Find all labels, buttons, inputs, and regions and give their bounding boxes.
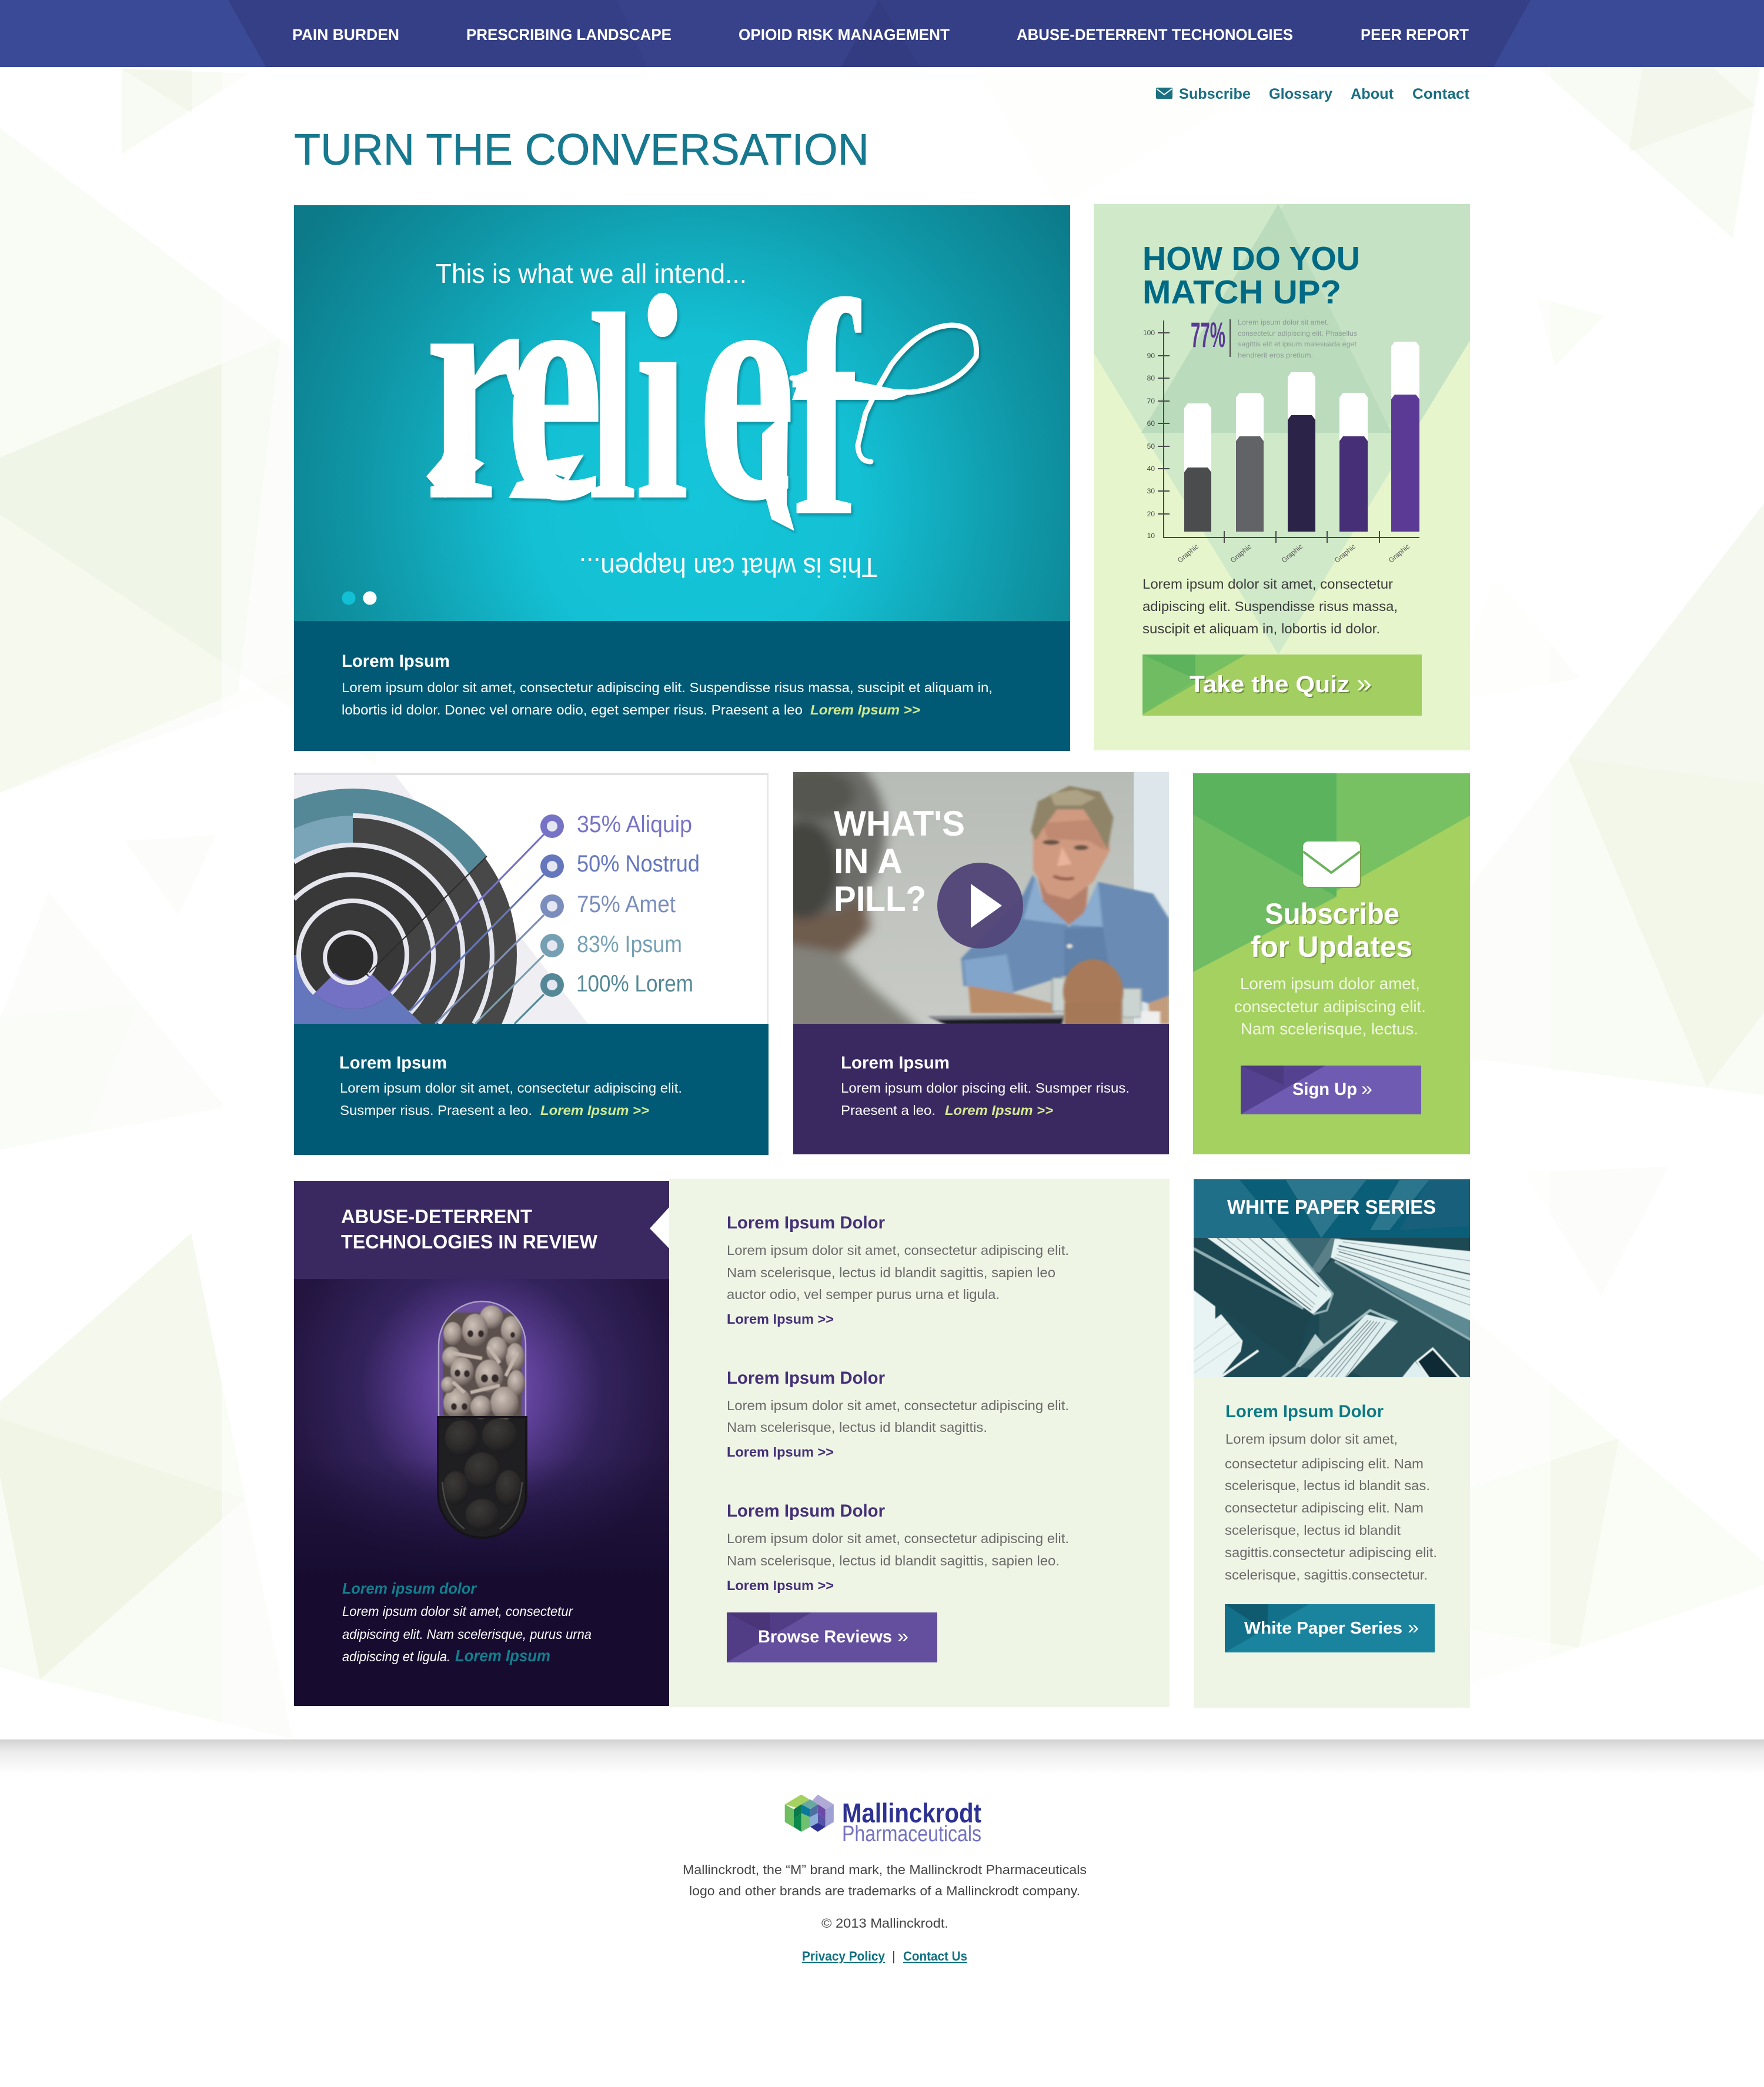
subscribe heading (1251, 897, 1412, 963)
y axis labels: 30 (1147, 487, 1155, 495)
white paper header band: WHITE PAPER SERIES (1227, 1196, 1436, 1218)
button: take the quiz: » (1357, 669, 1372, 698)
video title (834, 804, 965, 919)
review item 1: auctor odio, vel semper purus urna et ligula. (727, 1287, 1000, 1302)
legal text: Mallinckrodt, the “M” brand mark, the Mallinckrodt Pharmaceuticals (683, 1862, 1087, 1877)
white paper body: Lorem Ipsum Dolor (1225, 1402, 1384, 1421)
y axis labels: 20 (1147, 510, 1155, 518)
relief ambigram word: f (791, 239, 861, 580)
navigation bar (0, 0, 1764, 67)
leader lines (390, 834, 544, 1024)
subscribe body: consectetur adipiscing elit. (1234, 997, 1426, 1016)
y axis labels: 70 (1147, 397, 1155, 405)
heading: HOW DO YOU (1142, 240, 1360, 278)
caption: radial: Lorem ipsum dolor sit amet, consectetur adipiscing elit. (340, 1080, 682, 1096)
relief ambigram word (425, 199, 976, 580)
stat: 77%: 77% (1191, 315, 1225, 355)
footer links: Privacy Policy (802, 1949, 886, 1964)
x axis labels: Graphic (1229, 542, 1253, 565)
section header (294, 1181, 669, 1279)
caption: radial: Lorem Ipsum >> (540, 1103, 649, 1118)
y axis labels (1143, 329, 1155, 540)
x axis labels: Graphic (1176, 542, 1200, 565)
logo: Mallinckrodt: Mallinckrodt (842, 1798, 981, 1828)
section header: TECHNOLOGIES IN REVIEW (341, 1231, 598, 1253)
button: browse reviews (727, 1612, 937, 1662)
quiz description: Lorem ipsum dolor sit amet, consectetur (1142, 576, 1393, 592)
white paper body: consectetur adipiscing elit. Nam (1225, 1500, 1424, 1515)
stat: 77%: sagittis elit et ipsum malesuada eget (1238, 340, 1357, 348)
button: take the quiz: Take the Quiz (1190, 672, 1349, 697)
panel: subscribe (1193, 773, 1470, 1154)
nav item: abuse-deterrent: ABUSE-DETERRENT TECHONOLGIES (1017, 26, 1293, 44)
legal text (683, 1862, 1087, 1931)
footer links: Contact Us (903, 1949, 967, 1964)
utility links (1156, 86, 1470, 102)
review item 1 (727, 1213, 1069, 1327)
pill caption: adipiscing et ligula. (342, 1649, 450, 1664)
pill caption: Lorem ipsum dolor sit amet, consectetur (342, 1604, 573, 1619)
page title: TURN THE CONVERSATION (294, 125, 869, 174)
subscribe heading: for Updates (1251, 930, 1412, 963)
panel: how do you match up (1094, 204, 1470, 750)
relief ambigram word: i (634, 235, 689, 562)
review item 2: Lorem Ipsum Dolor (727, 1368, 885, 1388)
caption: radial: Susmper risus. Praesent a leo. (340, 1103, 532, 1118)
seated man (961, 786, 1170, 1024)
white paper body: consectetur adipiscing elit. Nam (1225, 1456, 1424, 1471)
pill caption (294, 1577, 669, 1706)
legend labels (576, 812, 700, 997)
panel: radial chart (294, 773, 769, 1155)
review item 3: Nam scelerisque, lectus id blandit sagittis, sapien leo. (727, 1553, 1060, 1568)
legend labels: 83% Ipsum (577, 931, 682, 957)
video title: WHAT'S (834, 804, 965, 843)
foreground hand (1063, 959, 1123, 1025)
caption: radial: Lorem Ipsum (339, 1053, 447, 1073)
y axis labels: 40 (1147, 465, 1155, 473)
bar chart (1143, 315, 1419, 565)
caption: hero: Lorem ipsum dolor sit amet, consectetur adipiscing elit. Suspendisse risus massa, suscipit et aliquam in, (342, 680, 993, 695)
white ring arcs (294, 816, 492, 1024)
button: browse reviews: » (897, 1625, 908, 1647)
photo: open books (1190, 1179, 1474, 1381)
x axis labels: Graphic (1280, 542, 1304, 565)
relief ambigram word: r (425, 199, 524, 570)
footer shadow (0, 1739, 1764, 1775)
nav item: pain burden: PAIN BURDEN (292, 26, 399, 44)
caption: video: Lorem Ipsum (841, 1053, 950, 1073)
footer links: | (892, 1949, 896, 1964)
review item 1: Lorem ipsum dolor sit amet, consectetur adipiscing elit. (727, 1243, 1069, 1258)
caption: hero: Lorem Ipsum >> (810, 702, 920, 717)
review item 2: Nam scelerisque, lectus id blandit sagittis. (727, 1420, 987, 1435)
stat: 77%: consectetur adipiscing elit. Phasellus (1238, 329, 1357, 338)
panel: review list (727, 1213, 1069, 1662)
quiz description: adipiscing elit. Suspendisse risus massa, (1142, 599, 1398, 614)
caption: video: Lorem Ipsum >> (945, 1103, 1053, 1118)
chart axes (1158, 320, 1419, 543)
logo: Mallinckrodt (785, 1795, 981, 1846)
y axis labels: 60 (1147, 419, 1155, 428)
link: subscribe: Subscribe (1179, 86, 1251, 102)
caption: hero: lobortis id dolor. Donec vel ornare odio, eget semper risus. Praesent a leo (342, 702, 803, 717)
review item 2 (727, 1368, 1069, 1460)
legal text: © 2013 Mallinckrodt. (821, 1916, 948, 1931)
panel: white paper series (1190, 1179, 1474, 1708)
link: contact: Contact (1412, 86, 1470, 102)
icon: envelope (1303, 842, 1360, 887)
y axis labels: 50 (1147, 442, 1155, 450)
bars (1184, 342, 1419, 532)
logo mark (785, 1795, 834, 1832)
panel: reviews background (669, 1179, 1170, 1707)
caption: video (793, 1024, 1169, 1154)
button: white paper series: » (1408, 1617, 1419, 1638)
blurred foreground man (793, 772, 923, 1024)
nav item: opioid risk management: OPIOID RISK MANAGEMENT (739, 26, 950, 44)
legend (543, 812, 700, 997)
subscribe body: Lorem ipsum dolor amet, (1240, 974, 1420, 993)
video title: IN A (834, 842, 903, 881)
foreground table items (927, 1011, 1160, 1025)
link: about: About (1351, 86, 1394, 102)
white paper body: sagittis.consectetur adipiscing elit. (1225, 1545, 1437, 1560)
button: take the quiz (1142, 655, 1422, 716)
white paper body (1225, 1402, 1437, 1582)
review item 3: Lorem ipsum dolor sit amet, consectetur adipiscing elit. (727, 1531, 1069, 1546)
link: glossary: Glossary (1269, 86, 1332, 102)
legend dots (543, 817, 561, 994)
panel: relief hero (294, 199, 1070, 751)
caption: video: Praesent a leo. (841, 1103, 936, 1118)
heading (1142, 240, 1360, 311)
button: white paper series (1225, 1604, 1435, 1652)
heading: MATCH UP? (1142, 273, 1341, 311)
relief ambigram word: l (587, 259, 637, 556)
white paper body: scelerisque, lectus id blandit (1225, 1522, 1401, 1538)
carousel dots (342, 592, 376, 605)
button: sign up: Sign Up (1292, 1080, 1357, 1099)
video title: PILL? (834, 879, 926, 919)
subscribe heading: Subscribe (1265, 897, 1399, 930)
pill caption: adipiscing elit. Nam scelerisque, purus urna (342, 1627, 592, 1642)
legend labels: 35% Aliquip (577, 812, 692, 837)
white paper body: Lorem ipsum dolor sit amet, (1225, 1431, 1398, 1447)
quiz description: suscipit et aliquam in, lobortis id dolor. (1142, 621, 1380, 636)
review item 2: Lorem Ipsum >> (727, 1444, 834, 1460)
blue sector (294, 955, 422, 1024)
button: sign up (1241, 1066, 1421, 1114)
nav item: prescribing landscape: PRESCRIBING LANDSCAPE (466, 26, 671, 44)
stat: 77% (1191, 315, 1357, 359)
relief ambigram word: e (697, 199, 796, 570)
legend labels: 50% Nostrud (577, 851, 700, 877)
caption: hero: Lorem Ipsum (342, 652, 450, 671)
footer links (802, 1949, 967, 1964)
white paper body: scelerisque, sagittis.consectetur. (1225, 1567, 1428, 1582)
review item 1: Nam scelerisque, lectus id blandit sagittis, sapien leo (727, 1265, 1055, 1280)
icon: play button (937, 863, 1023, 949)
legend labels: 100% Lorem (576, 971, 693, 997)
pill caption: Lorem Ipsum (455, 1647, 550, 1665)
caption: video: Lorem ipsum dolor piscing elit. Susmper risus. (841, 1080, 1130, 1096)
pill caption: Lorem ipsum dolor (342, 1580, 477, 1597)
photo: doctor and patient (793, 772, 1169, 1024)
icon: envelope (1156, 88, 1172, 99)
subscribe body (1234, 974, 1426, 1038)
relief ambigram word: e (505, 199, 604, 570)
hero line: intent: This is what we all intend... (436, 258, 747, 289)
footer (683, 1795, 1087, 1964)
x axis labels: Graphic (1387, 542, 1411, 565)
quiz description (1142, 576, 1398, 636)
panel: abuse-deterrent pill (294, 1181, 669, 1706)
y axis labels: 90 (1147, 352, 1155, 360)
white paper body: scelerisque, lectus id blandit sas. (1225, 1478, 1430, 1493)
button: white paper series: White Paper Series (1244, 1619, 1402, 1638)
review item 1: Lorem Ipsum Dolor (727, 1213, 885, 1233)
nav item: peer report: PEER REPORT (1361, 26, 1469, 44)
panel: what's in a pill video (793, 772, 1169, 1154)
stat: 77%: Lorem ipsum dolor sit amet, (1238, 318, 1329, 326)
review item 3: Lorem Ipsum Dolor (727, 1501, 885, 1521)
caption: hero (294, 621, 1070, 751)
x axis labels: Graphic (1333, 542, 1357, 565)
y axis labels: 10 (1147, 532, 1155, 540)
relief flourishes (426, 429, 485, 498)
logo: Mallinckrodt: Pharmaceuticals (842, 1822, 981, 1846)
stat: 77%: hendrerit eros pretium. (1238, 351, 1313, 359)
review item 3: Lorem Ipsum >> (727, 1578, 834, 1593)
caption: radial (294, 1024, 769, 1155)
y axis labels: 80 (1147, 374, 1155, 382)
review item 2: Lorem ipsum dolor sit amet, consectetur adipiscing elit. (727, 1398, 1069, 1413)
icon: capsule of skulls (438, 1301, 526, 1538)
radial rings graphic (294, 775, 588, 1024)
y axis labels: 100 (1143, 329, 1155, 337)
review item 1: Lorem Ipsum >> (727, 1311, 834, 1327)
section header: ABUSE-DETERRENT (341, 1206, 532, 1227)
button: sign up: » (1361, 1078, 1372, 1099)
hero line: flipped: This is what can happen... (579, 552, 877, 583)
white paper header band (1194, 1179, 1470, 1238)
review item 3 (727, 1501, 1069, 1593)
x axis labels (1176, 542, 1411, 565)
subscribe body: Nam scelerisque, lectus. (1241, 1020, 1418, 1038)
legal text: logo and other brands are trademarks of a Mallinckrodt company. (689, 1884, 1080, 1898)
button: browse reviews: Browse Reviews (758, 1627, 892, 1647)
legend labels: 75% Amet (577, 891, 676, 917)
